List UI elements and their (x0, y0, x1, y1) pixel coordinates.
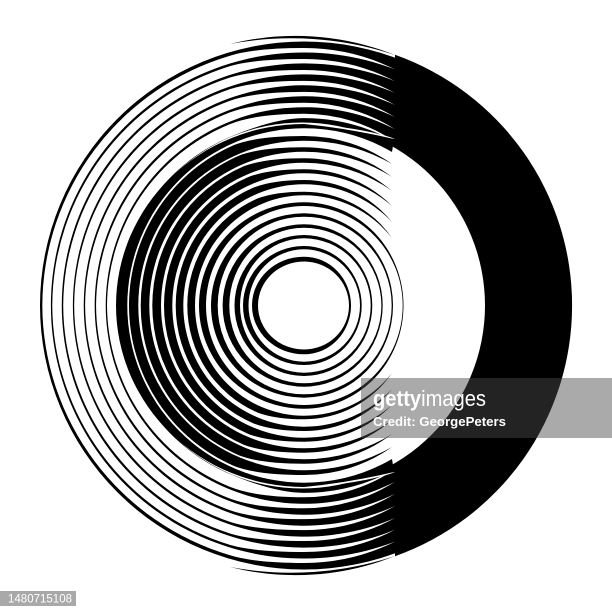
inner complete rings (199, 202, 404, 409)
id tag background (0, 591, 76, 606)
central white disc (119, 122, 485, 488)
image id tag (0, 591, 76, 606)
outer black disc (40, 36, 572, 575)
watermark background (361, 378, 612, 438)
concentric circle graphic (40, 36, 572, 575)
watermark credit text: Credit: GeorgePeters (373, 415, 506, 429)
outer band white crescents (42, 48, 395, 563)
watermark logo text: gettyimages (373, 386, 486, 411)
id tag number: 1480715108 (8, 594, 72, 606)
inner open black arcs with tapered tips (116, 124, 394, 487)
watermark banner (361, 378, 612, 438)
